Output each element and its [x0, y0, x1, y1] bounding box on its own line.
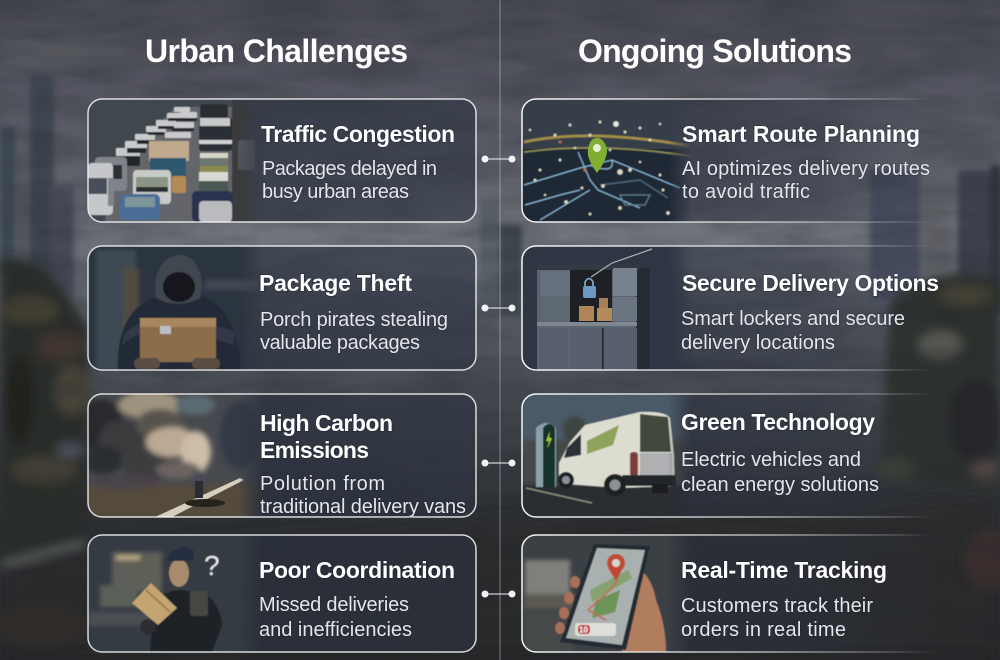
panel: Green Technology — [522, 394, 945, 517]
image: hooded thief with package — [88, 246, 263, 370]
title: Poor Coordination: Poor Coordination — [259, 557, 455, 583]
description: traffic — [262, 158, 437, 203]
description: emissions — [260, 473, 466, 518]
title: Package Theft: Package Theft — [259, 270, 412, 296]
title: High Carbon Emissions: High Carbon — [260, 410, 393, 436]
title: Secure Delivery Options: Secure Delivery Options — [682, 270, 939, 296]
panel: Poor Coordination — [88, 535, 476, 652]
description: coordination — [259, 594, 412, 641]
description: green technology: clean energy solutions — [681, 474, 879, 496]
image: AI route map — [522, 120, 690, 222]
panel: High Carbon Emissions — [76, 391, 476, 524]
panel: Traffic Congestion — [88, 99, 476, 222]
heading: Urban Challenges: Urban Challenges — [145, 33, 408, 69]
description: route planning: to avoid traffic — [682, 181, 810, 203]
title: High Carbon Emissions: Emissions — [260, 437, 369, 463]
connector: coordination to tracking — [482, 590, 516, 598]
title: Smart Route Planning: Smart Route Planning — [682, 121, 920, 147]
panel: Real-Time Tracking — [522, 535, 945, 652]
title: Real-Time Tracking: Real-Time Tracking — [681, 557, 887, 583]
panel: Package Theft — [88, 246, 476, 370]
description: emissions: Polution from — [260, 473, 385, 495]
connector: emissions to green technology — [482, 460, 516, 466]
heading: Ongoing Solutions: Ongoing Solutions — [578, 33, 852, 69]
question mark: ? — [204, 550, 220, 581]
image: traffic jam — [88, 99, 263, 222]
panel: Smart Route Planning — [522, 99, 945, 222]
description: secure delivery: Smart lockers and secure — [681, 308, 905, 330]
description: coordination: Missed deliveries — [259, 594, 409, 616]
image: phone with tracking map — [522, 535, 692, 652]
description: emissions: traditional delivery vans — [260, 496, 466, 518]
map pin — [588, 138, 607, 173]
description: green technology: Electric vehicles and — [681, 449, 861, 471]
description: secure delivery: delivery locations — [681, 332, 835, 354]
image: electric van at charger — [522, 394, 692, 517]
panel: Secure Delivery Options — [522, 246, 945, 370]
description: theft — [260, 309, 448, 354]
description: coordination: and inefficiencies — [259, 619, 412, 641]
description: route planning — [682, 158, 930, 203]
description: traffic: busy urban areas — [262, 181, 409, 203]
description: secure delivery — [681, 308, 905, 354]
description: traffic: Packages delayed in — [262, 158, 437, 180]
image: smart locker with parcels — [522, 246, 692, 370]
title: High Carbon Emissions — [260, 410, 393, 463]
charging station — [536, 423, 556, 487]
connector: traffic to route planning — [482, 156, 516, 162]
description: green technology — [681, 449, 879, 496]
description: route planning: AI optimizes delivery routes — [682, 158, 930, 180]
description: theft: Porch pirates stealing — [260, 309, 448, 331]
time badge: 10 — [579, 626, 588, 634]
lock icon — [583, 278, 596, 298]
image: confused courier — [88, 536, 248, 652]
description: real-time tracking: orders in real time — [681, 619, 846, 641]
description: theft: valuable packages — [260, 332, 420, 354]
central divider line — [499, 0, 501, 660]
connector: theft to secure delivery — [482, 304, 516, 312]
title: Green Technology: Green Technology — [681, 409, 875, 435]
image: smoke on a road — [88, 394, 258, 517]
description: real-time tracking: Customers track their — [681, 595, 873, 617]
description: real-time tracking — [681, 595, 873, 641]
title: Traffic Congestion: Traffic Congestion — [261, 121, 455, 147]
